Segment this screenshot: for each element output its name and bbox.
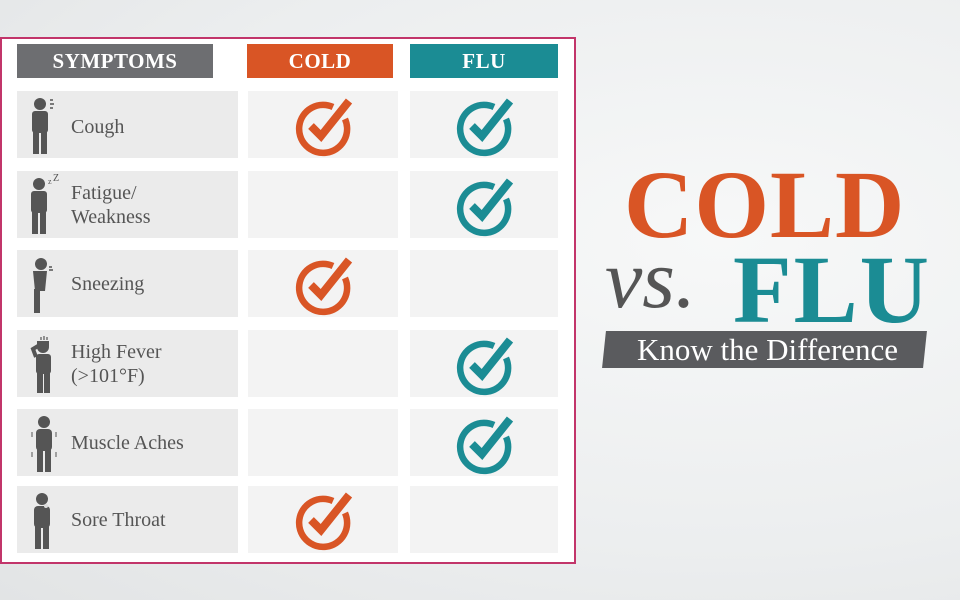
check: flu [456, 178, 513, 236]
title block: Know the Difference [637, 332, 898, 367]
title: COLD: COLD [624, 151, 905, 258]
row: muscle aches [17, 409, 558, 476]
icon: cough person [32, 98, 54, 154]
check: cold [296, 258, 352, 316]
header: flu: FLU [462, 49, 506, 73]
label: fatigue: Fatigue/ [71, 182, 137, 204]
row: fatigue [17, 171, 558, 238]
row: high fever [17, 330, 558, 397]
check: cold [296, 492, 352, 550]
header: symptoms: SYMPTOMS [53, 49, 177, 73]
label: high fever [71, 341, 162, 387]
check: flu [456, 98, 513, 156]
row: sneezing [17, 250, 558, 317]
icon: sneezing person [33, 258, 53, 313]
panel: table [0, 37, 576, 564]
header: cold: COLD [289, 49, 351, 73]
header: symptoms [17, 44, 213, 78]
title: vs.: vs. [605, 233, 696, 326]
label: muscle aches: Muscle Aches [71, 432, 184, 454]
label: fatigue: Weakness [71, 206, 150, 228]
check: flu [456, 338, 513, 396]
label: sneezing: Sneezing [71, 273, 144, 295]
label: sore throat: Sore Throat [71, 509, 166, 531]
label: fatigue [71, 182, 150, 228]
icon: aching person [31, 416, 57, 472]
icon: sore throat person [34, 493, 50, 549]
rows [17, 91, 558, 553]
header: cold [247, 44, 393, 78]
banner: know the difference [602, 331, 927, 368]
icon: tired person [31, 174, 59, 234]
label: cough: Cough [71, 116, 124, 138]
title block [602, 151, 931, 368]
icon: fever person [30, 336, 51, 393]
icon: tired person: z [48, 177, 52, 186]
row: sore throat [17, 486, 558, 553]
row: cough [17, 91, 558, 158]
check: flu [456, 416, 513, 474]
check: cold [296, 98, 352, 156]
title: FLU: FLU [733, 236, 931, 343]
header: flu [410, 44, 558, 78]
label: high fever: High Fever [71, 341, 162, 363]
label: high fever: (>101°F) [71, 365, 145, 387]
